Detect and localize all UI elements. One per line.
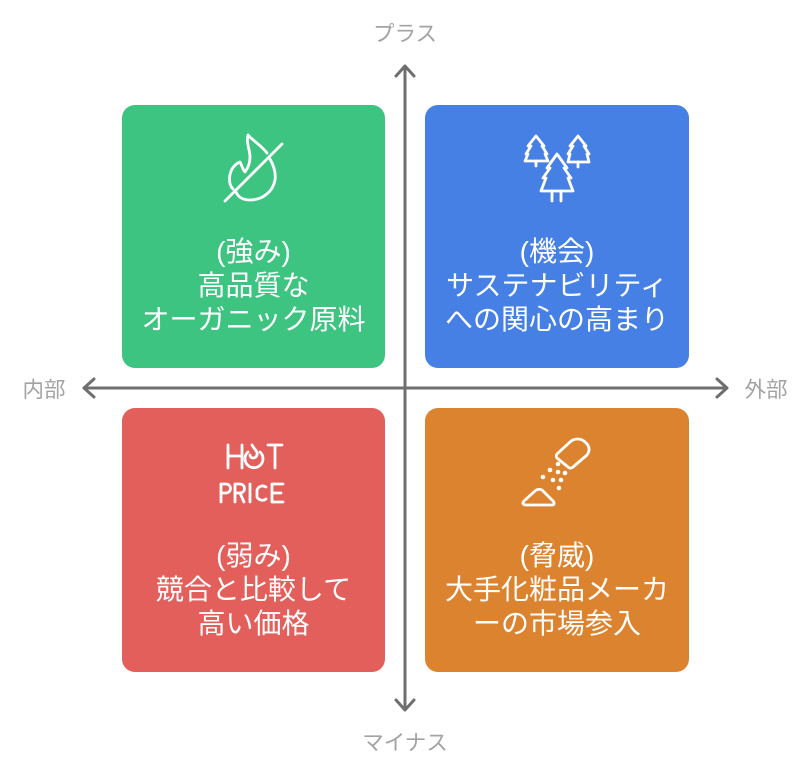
heading: weaknesses: (弱み) [216,540,291,571]
text: strengths line 2: オーガニック原料 [141,304,366,335]
icon: pouring powder [523,439,589,505]
text: weaknesses line 1: 競合と比較して [156,574,351,605]
axis label: plus: プラス [373,22,437,46]
heading: threats: (脅威) [520,540,594,571]
arrow: vertical axis [396,66,414,710]
text: threats line 2: ーの市場参入 [473,608,641,639]
text: weaknesses line 2: 高い価格 [197,608,310,639]
axis label: minus: マイナス [362,731,448,755]
text: threats line 1: 大手化粧品メーカ [445,574,669,605]
panel: strengths [122,105,385,368]
axis label: external: 外部 [744,378,788,402]
panel: threats [425,408,689,672]
axis label: internal: 内部 [22,378,66,402]
heading: opportunities: (機会) [520,236,594,267]
heading: strengths: (強み) [216,236,291,267]
panel: opportunities [425,105,689,368]
text: strengths line 1: 高品質な [197,270,310,301]
icon: crossed-out flame [225,135,282,201]
icon: hot price [221,445,283,502]
arrow: horizontal axis [84,379,727,397]
panel: weaknesses [122,408,385,672]
text: opportunities line 2: への関心の高まり [445,304,669,335]
icon: three trees [525,136,589,201]
text: opportunities line 1: サステナビリティ [446,270,668,301]
